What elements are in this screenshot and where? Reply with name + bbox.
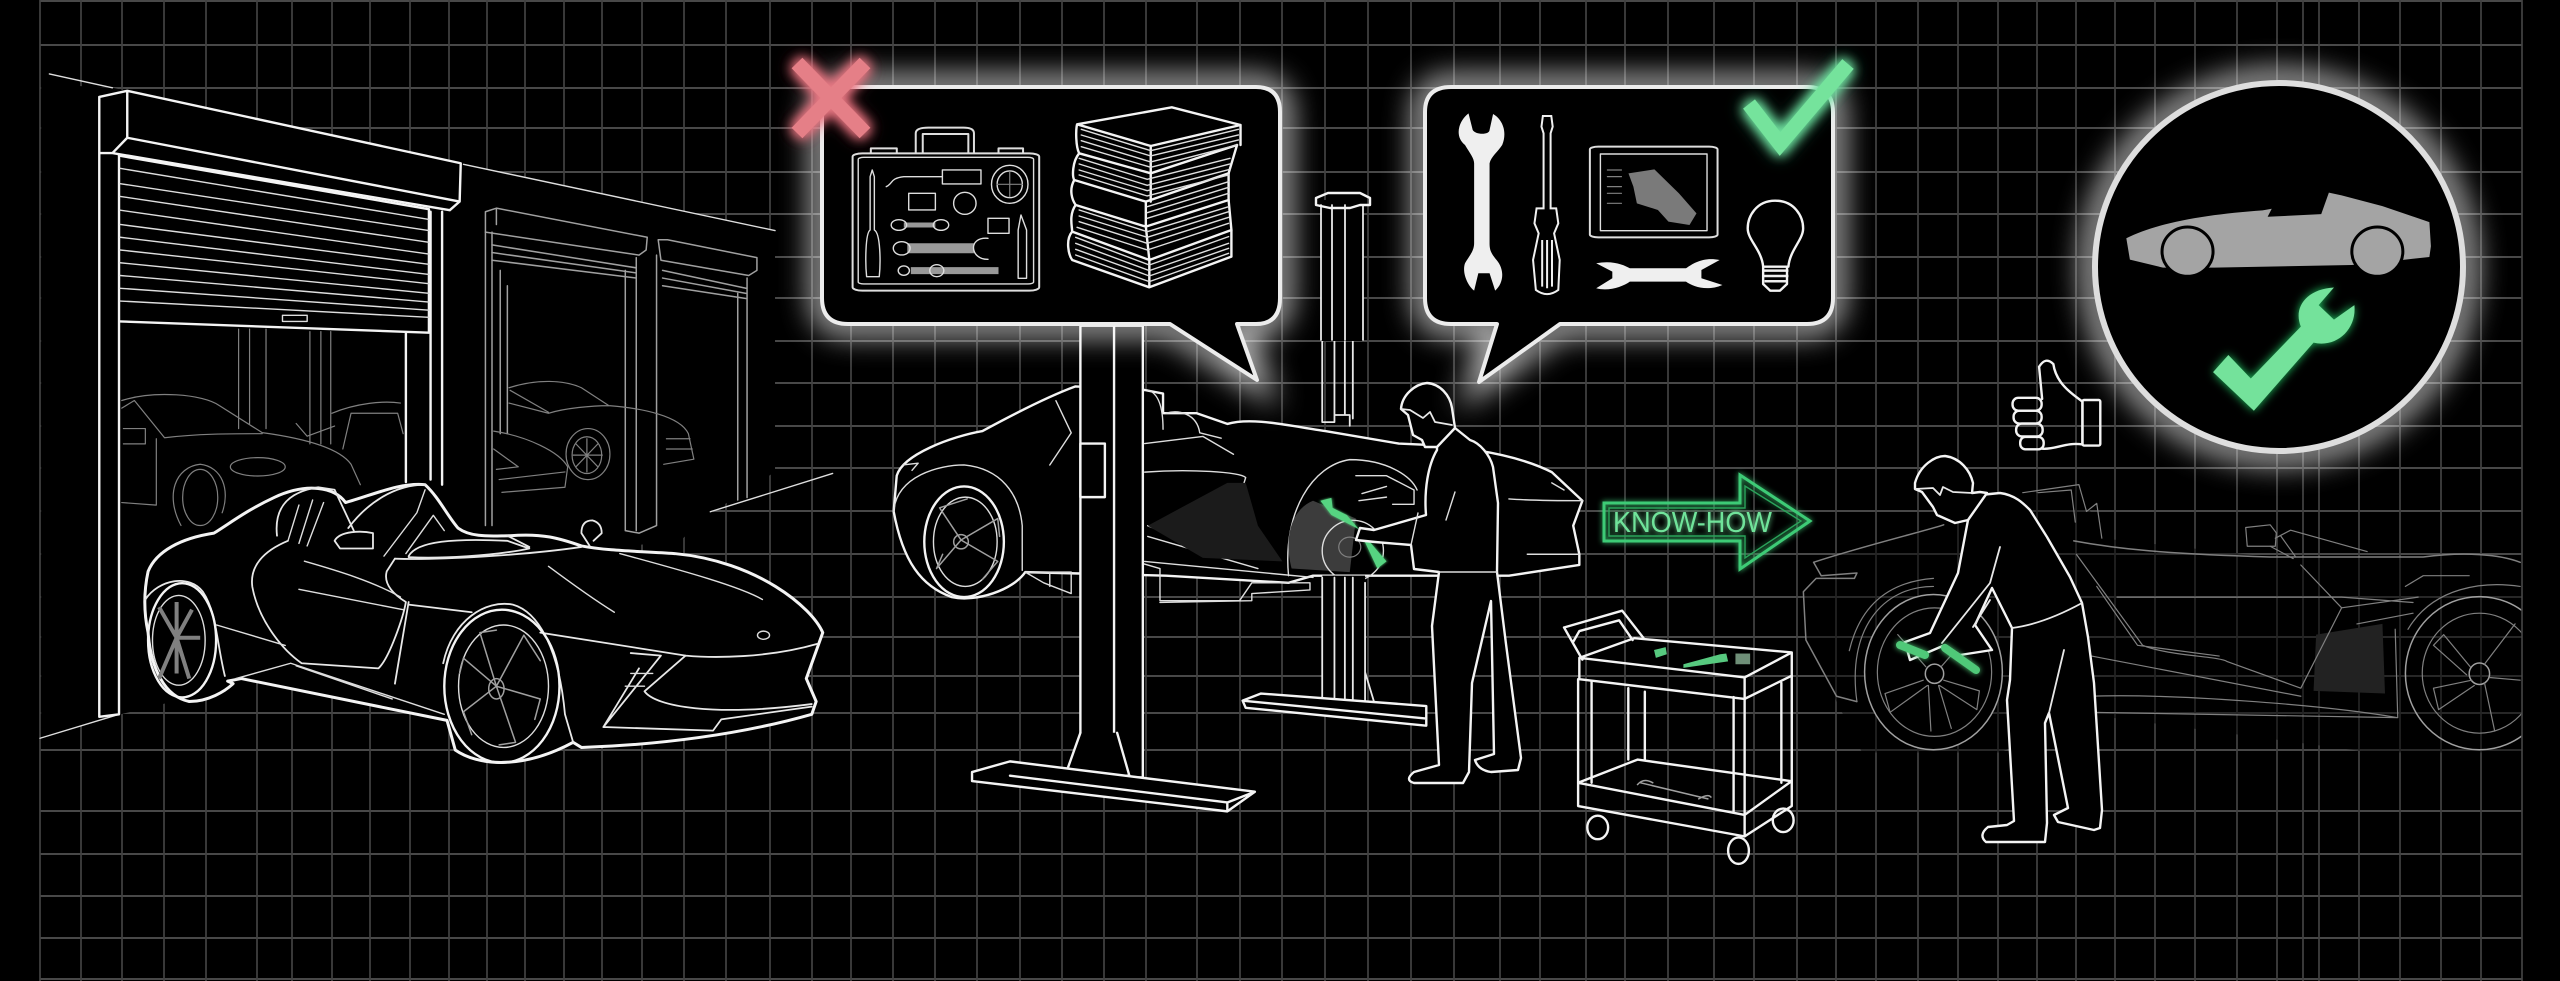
red cross mark [797, 63, 865, 133]
lifted car rear wheel [924, 486, 1004, 597]
right speech bubble: right tools [1425, 87, 1833, 382]
cars parked inside first garage [122, 329, 403, 526]
KNOW-HOW arrow [1604, 475, 1810, 569]
mechanic body [1356, 428, 1521, 783]
lifted car body [894, 386, 1582, 598]
result circle badge [2095, 83, 2463, 451]
car silhouette [2126, 193, 2431, 276]
lifted car on two-post lift [894, 386, 1582, 602]
brake assembly under arch [1148, 476, 1414, 581]
glow behind result circle [2093, 81, 2465, 453]
cars parked in background bays [494, 381, 694, 492]
second and third garage doors [485, 208, 757, 533]
garage building with roller doors [40, 74, 833, 738]
green wrench on brake [1320, 498, 1386, 569]
roadster rear wheel [148, 583, 216, 697]
roadster front wheel [444, 610, 559, 763]
rear lift post [1243, 340, 1426, 726]
icon: horizontal wrench [1596, 259, 1722, 289]
roadster details [145, 485, 817, 742]
green check mark over right bubble [1749, 64, 1848, 144]
glow behind right speech bubble [1425, 87, 1833, 382]
mechanic working on lifted car [1356, 383, 1521, 783]
mechanic tightening wheel [1900, 456, 2102, 842]
green wrench in mechanic's hands [1900, 645, 1976, 670]
glow behind left speech bubble [822, 87, 1280, 380]
icon: tall wrench [1459, 113, 1504, 291]
mechanic body [1905, 493, 2102, 842]
mechanic head [1401, 383, 1455, 447]
left speech bubble: wrong tools [822, 87, 1280, 380]
lifted car details [894, 390, 1582, 602]
tool cart [1564, 611, 1794, 864]
icon: screwdriver [1533, 116, 1560, 294]
rear lift post top [1316, 193, 1370, 341]
icon: briefcase of tools [853, 128, 1039, 291]
icon: tablet with car diagram [1590, 147, 1718, 237]
serviced car front wheel [1865, 594, 2002, 750]
main open garage door [99, 91, 461, 717]
right transparent car under service [1803, 485, 2553, 752]
mechanic head [1915, 456, 1987, 523]
serviced car rear wheel [2404, 596, 2522, 750]
cart top tools [1654, 647, 1750, 668]
green wrench check [2213, 287, 2355, 411]
icon: light bulb [1748, 201, 1803, 291]
icon: stack of books [1068, 107, 1241, 287]
thumbs up icon [2013, 361, 2100, 449]
arrow label: KNOW-HOW [1613, 507, 1773, 539]
roadster body [145, 484, 823, 762]
front lift post [972, 326, 1255, 811]
main white roadster in front of garage [145, 484, 823, 763]
